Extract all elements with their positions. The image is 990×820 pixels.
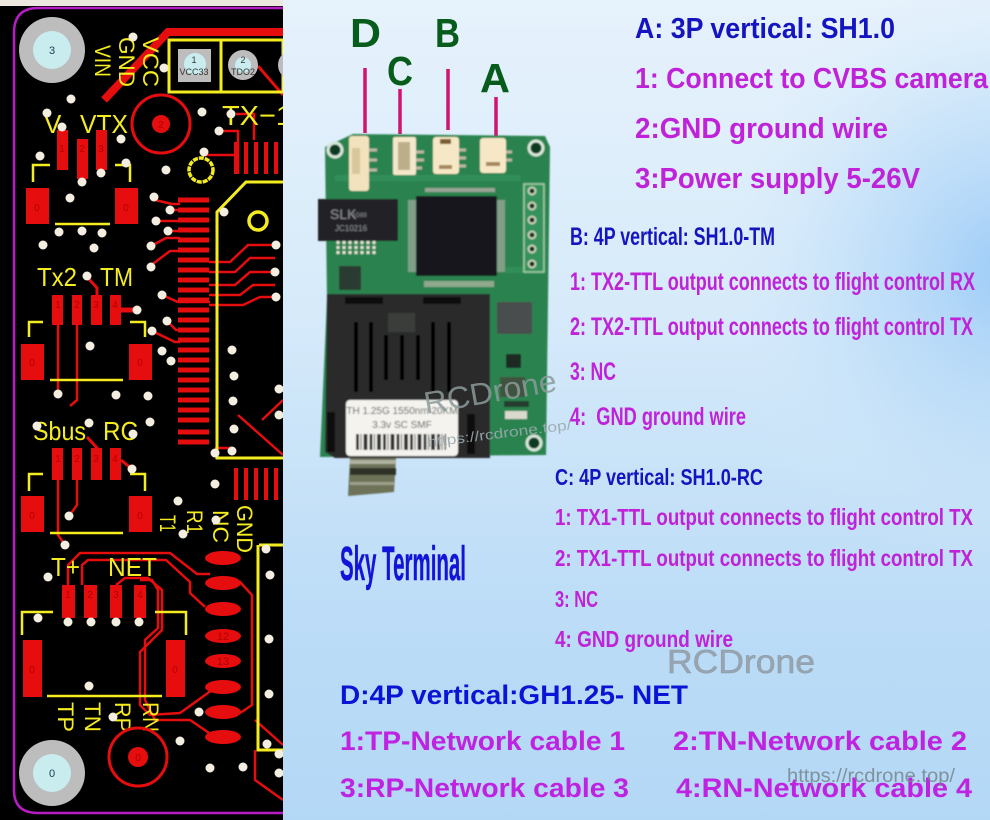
optical module bbox=[325, 294, 490, 458]
connector B bbox=[433, 137, 466, 174]
header connector box bbox=[168, 38, 283, 94]
SLK transformer: 1G88 bbox=[352, 213, 367, 219]
connector Tx2 TM bbox=[21, 262, 152, 380]
connector Tx2 TM: 0 bbox=[29, 358, 35, 369]
connector Sbus RC: 1 bbox=[55, 454, 61, 465]
fibre connector bbox=[348, 458, 396, 496]
text block A: A: 3P vertical: SH1.0 bbox=[635, 13, 895, 45]
rotated yellow labels: GND bbox=[232, 505, 257, 553]
text block D bbox=[340, 680, 972, 803]
label VTX: V bbox=[44, 109, 62, 139]
connector T+ NET: 1 bbox=[65, 590, 71, 601]
connector Sbus RC: 0 bbox=[137, 511, 143, 522]
header connector box: 1 bbox=[191, 55, 197, 65]
module label: TH 1.25G 1550nm 20KM bbox=[346, 406, 458, 417]
connector Tx2 TM: 0 bbox=[137, 358, 143, 369]
oval pads 9 to 16: 12 bbox=[217, 631, 229, 643]
red ring pad 0: 0 bbox=[135, 753, 141, 764]
small regulator bbox=[506, 354, 521, 368]
text block A: 3:Power supply 5-26V bbox=[635, 163, 921, 195]
rotated yellow labels: GND bbox=[114, 37, 139, 87]
connector T+ NET bbox=[22, 552, 186, 697]
rotated yellow labels: T1 bbox=[155, 515, 180, 532]
connector Tx2 TM: TM bbox=[100, 262, 133, 292]
connector Sbus RC: RC bbox=[103, 416, 138, 446]
watermark RCDrone: RCDrone bbox=[667, 643, 815, 680]
connector T+ NET: 2 bbox=[87, 590, 93, 601]
text block D: 2:TN-Network cable 2 bbox=[673, 726, 967, 756]
connector VTX: 1 bbox=[59, 144, 65, 155]
red ring pad 0 bbox=[109, 728, 167, 786]
rotated yellow labels bbox=[53, 37, 257, 732]
connector Tx2 TM: 1 bbox=[55, 300, 61, 311]
connector Sbus RC: 2 bbox=[74, 454, 80, 465]
header connector box: 2 bbox=[240, 55, 246, 65]
main chip bbox=[408, 188, 505, 287]
panel: PCB layout bbox=[0, 0, 308, 820]
module label bbox=[346, 400, 458, 456]
mounting hole 0: 0 bbox=[49, 768, 55, 780]
connector T+ NET: T+ bbox=[51, 552, 80, 582]
mounting hole 0 bbox=[19, 740, 85, 806]
mounting holes bbox=[328, 141, 543, 450]
rotated yellow labels: VIN bbox=[90, 45, 115, 77]
text block D: 1:TP-Network cable 1 bbox=[340, 726, 625, 756]
red ring pad 2 bbox=[132, 95, 190, 153]
red ring pad 2: 2 bbox=[158, 120, 164, 131]
connector T+ NET: NET bbox=[108, 552, 157, 582]
mounting hole 3 bbox=[19, 17, 85, 83]
text block B: 3: NC bbox=[570, 358, 616, 386]
text block B: B: 4P vertical: SH1.0-TM bbox=[570, 223, 775, 251]
connector C bbox=[393, 137, 424, 175]
oval pads 9 to 16 bbox=[205, 551, 241, 744]
watermark on photo bbox=[421, 363, 572, 450]
text block D: 3:RP-Network cable 3 bbox=[340, 773, 629, 803]
text block A bbox=[635, 13, 989, 195]
connector VTX: 0 bbox=[123, 203, 129, 214]
connector A bbox=[480, 138, 512, 173]
connector Sbus RC: Sbus bbox=[33, 416, 86, 446]
pcb body bbox=[320, 134, 550, 457]
pcb red traces bbox=[58, 32, 283, 800]
pin header bbox=[524, 184, 544, 272]
rotated yellow labels: RN bbox=[138, 702, 163, 732]
text block C: 4: GND ground wire bbox=[555, 626, 733, 652]
connector letters: C bbox=[387, 48, 413, 94]
connector letters: D bbox=[350, 10, 381, 56]
connector Tx2 TM: 4 bbox=[112, 300, 118, 311]
resistor row bbox=[500, 377, 529, 419]
rotated yellow labels: TP bbox=[53, 702, 78, 732]
connector D bbox=[349, 136, 377, 191]
header connector box: TDO2 bbox=[231, 67, 255, 77]
text: Sky Terminal bbox=[340, 538, 466, 591]
connector VTX: 2 bbox=[79, 144, 85, 155]
connector T+ NET: 0 bbox=[172, 665, 178, 676]
watermark on photo: https://rcdrone.top/ bbox=[426, 416, 572, 450]
connector VTX: 3 bbox=[98, 144, 104, 155]
connector VTX: VTX bbox=[80, 109, 128, 139]
connector Tx2 TM: Tx2 bbox=[37, 262, 77, 292]
text block A: 2:GND ground wire bbox=[635, 113, 888, 145]
text block B bbox=[570, 223, 975, 431]
connector VTX: 0 bbox=[34, 203, 40, 214]
connector letters: B bbox=[435, 10, 460, 56]
connector T+ NET: 4 bbox=[137, 590, 143, 601]
rotated yellow labels: R1 bbox=[182, 510, 207, 534]
SLK transformer: JC10216 bbox=[335, 224, 368, 233]
SLK transformer: SLK bbox=[330, 206, 357, 222]
rotated yellow labels: NC bbox=[208, 510, 233, 543]
SLK transformer bbox=[318, 199, 398, 254]
via dots bbox=[32, 32, 284, 778]
connector Tx2 TM: 2 bbox=[74, 300, 80, 311]
rotated yellow labels: TN bbox=[80, 702, 105, 732]
oval pads 9 to 16: 13 bbox=[217, 656, 229, 668]
connector T+ NET: 3 bbox=[113, 590, 119, 601]
rotated yellow labels: RP bbox=[110, 702, 135, 732]
header connector box: VCC33 bbox=[179, 67, 209, 77]
connector letters: A bbox=[480, 55, 510, 101]
module label: 3.3v SC SMF bbox=[372, 420, 432, 431]
text block C: C: 4P vertical: SH1.0-RC bbox=[555, 464, 763, 490]
small chip bbox=[339, 266, 361, 290]
mounting hole 3: 3 bbox=[49, 45, 55, 57]
connector Tx2 TM: 3 bbox=[93, 300, 99, 311]
watermark URL: https://rcdrone.top/ bbox=[787, 766, 956, 787]
connector letters bbox=[350, 10, 510, 101]
connector T+ NET: 0 bbox=[29, 665, 35, 676]
connector Sbus RC bbox=[21, 416, 152, 533]
rotated yellow labels: VCC bbox=[138, 37, 163, 87]
text block B: 4: GND ground wire bbox=[570, 403, 746, 431]
text block D: D:4P vertical:GH1.25- NET bbox=[340, 680, 689, 710]
connector Sbus RC: 3 bbox=[93, 454, 99, 465]
label TX-1: TX−1 bbox=[222, 100, 292, 131]
connector VTX bbox=[26, 109, 138, 224]
text block C bbox=[555, 464, 974, 652]
board photo bbox=[318, 134, 550, 496]
text block D: 4:RN-Network cable 4 bbox=[676, 773, 972, 803]
connector Sbus RC: 4 bbox=[112, 454, 118, 465]
watermark on photo: RCDrone bbox=[421, 363, 559, 421]
pointer lines bbox=[365, 68, 496, 136]
text block C: 3: NC bbox=[555, 586, 598, 612]
power inductor bbox=[497, 302, 532, 334]
IC outline and pin rows bbox=[178, 142, 283, 750]
connector Sbus RC: 0 bbox=[29, 511, 35, 522]
